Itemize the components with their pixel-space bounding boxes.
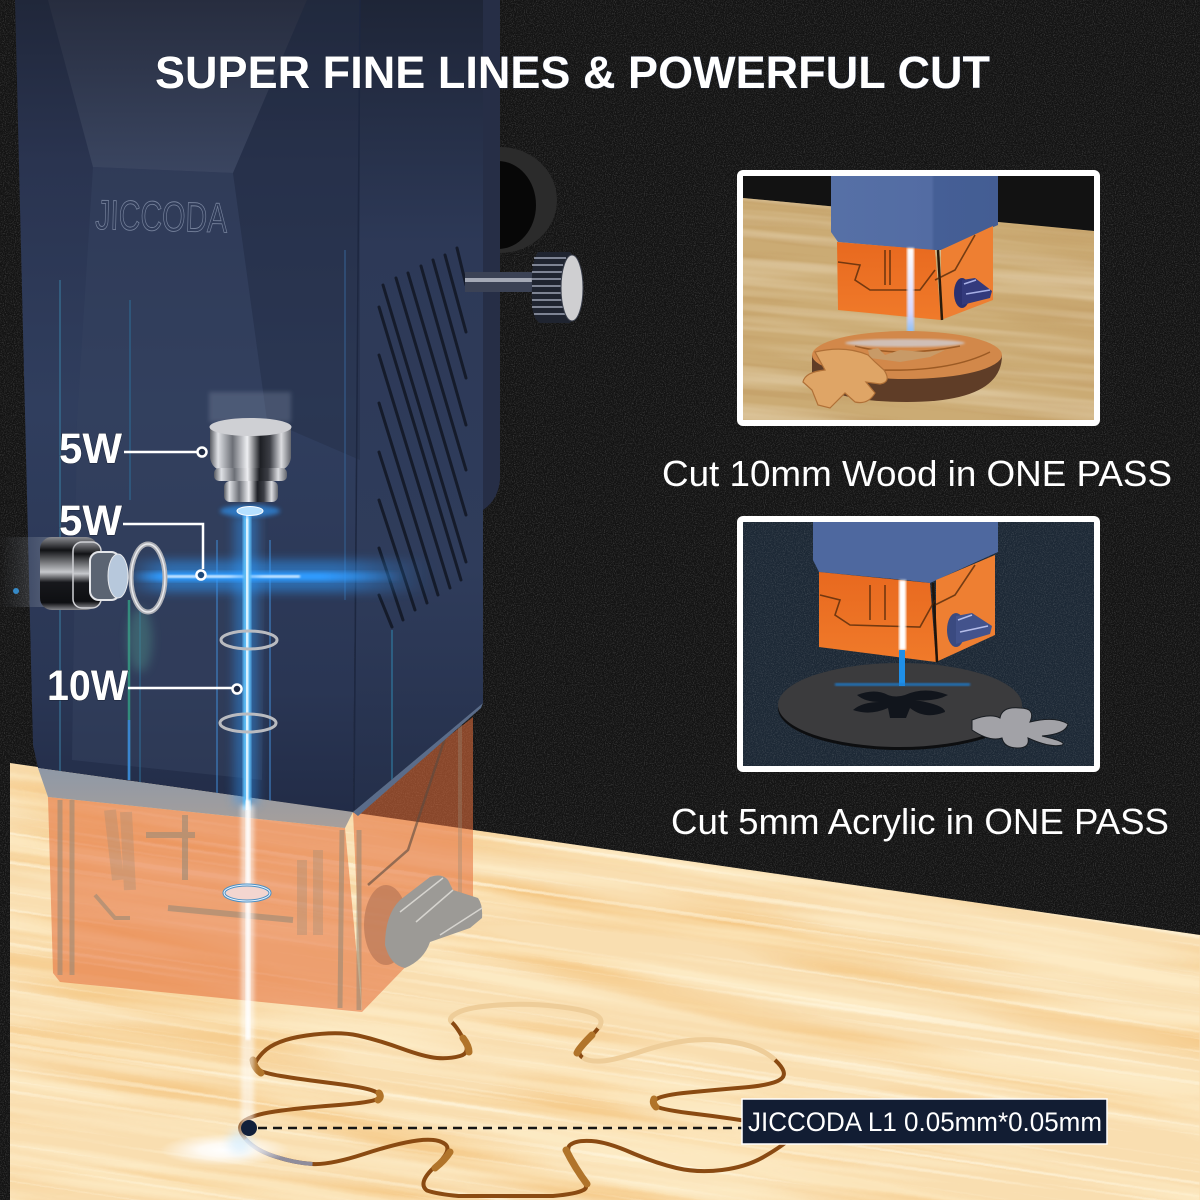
laser head blue [813,522,998,583]
knob blue [947,613,992,647]
laser head blue [831,176,998,250]
rear thumb wheel [443,147,557,253]
wood surface inset [743,198,1094,420]
beam [899,580,906,650]
caption: wood: Cut 10mm Wood in ONE PASS [662,453,1172,494]
orange shield [837,226,993,320]
label: 5W side: 5W [59,497,122,545]
shield side face [353,717,473,1012]
laser cut flower outline in wood [240,1004,793,1196]
label: 5W top [59,425,206,473]
shield front face [48,797,362,1012]
label: 10W [47,662,242,710]
side chrome lens: 5W [0,537,165,612]
panel: cut acrylic photo [737,516,1100,772]
top chrome lens: 5W [209,392,292,517]
internal mechanism seen through shield [60,725,460,1010]
wood disc [812,331,1002,402]
cut grey flower [972,708,1068,748]
laser module body [15,0,500,828]
brand mark JICCODA: JICCODA [95,191,228,241]
orange acrylic laser shield [48,717,482,1012]
front upper facet [48,0,307,173]
beam [907,248,914,340]
cut flower piece [803,349,887,408]
optical rings on beam [220,631,277,901]
title: SUPER FINE LINES & POWERFUL CUT [155,47,990,98]
laser transparency streaks [60,250,392,825]
orange shield [819,555,995,662]
caption: acrylic: Cut 5mm Acrylic in ONE PASS [671,801,1169,842]
grey lower band of body [38,768,353,828]
acrylic disc [778,663,1022,750]
thumbscrew on the side [465,252,583,323]
callout: spot size [241,1099,1107,1144]
laser impact flare [160,1130,290,1166]
shield adjustment knob [364,876,482,968]
body rear strip [483,0,500,510]
label: 10W: 10W [47,662,128,710]
callout: spot size: JICCODA L1 0.05mm*0.05mm [748,1107,1102,1137]
label: 5W top: 5W [59,425,122,473]
knob blue [954,278,992,308]
panel: cut wood photo [737,170,1100,426]
label: 5W side [59,497,206,580]
wood table surface [10,763,1200,1200]
vertical laser beam [234,515,258,1130]
side vent slits [379,248,466,627]
horizontal laser beam [128,560,428,592]
